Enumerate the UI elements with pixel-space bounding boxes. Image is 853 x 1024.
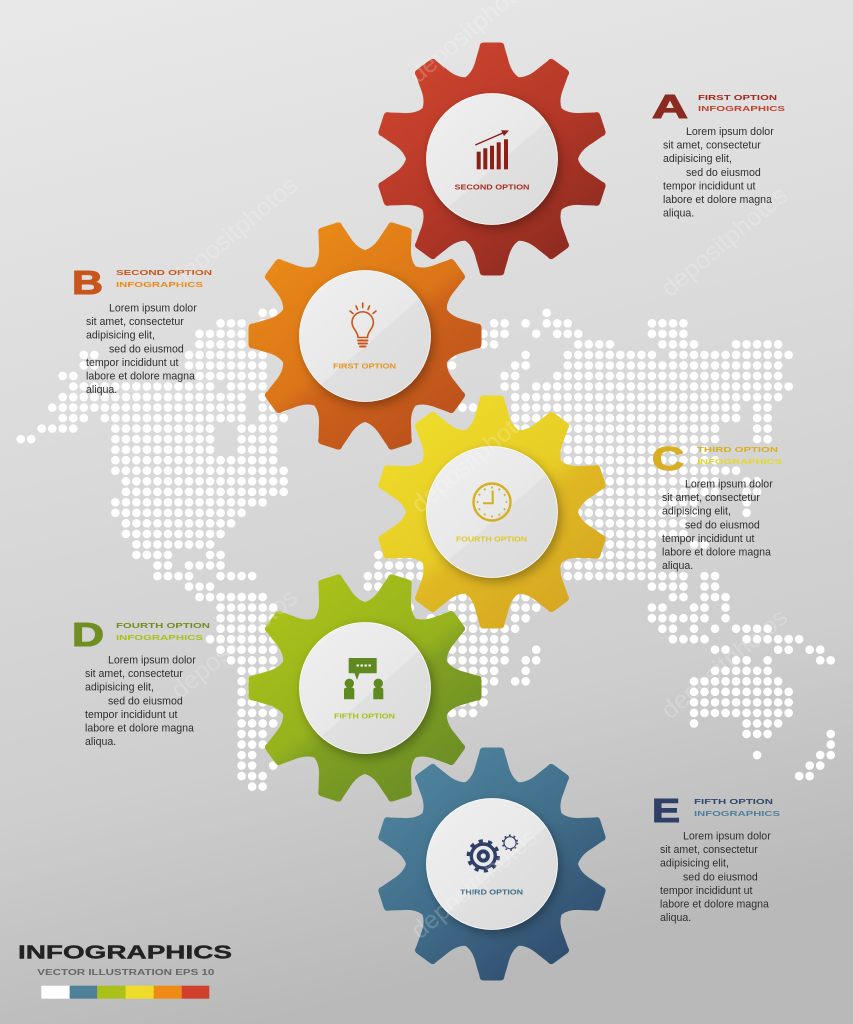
text block D	[72, 616, 210, 748]
gear: green, fifth option	[248, 574, 482, 802]
letter D: D	[72, 616, 104, 653]
body B: Lorem ipsum dolor	[109, 302, 197, 314]
heading D: INFOGRAPHICS	[116, 633, 203, 642]
body C: Lorem ipsum dolor	[685, 478, 773, 490]
body E: Lorem ipsum dolor	[683, 830, 771, 842]
text block C	[652, 440, 782, 572]
watermarks: depositphotos	[166, 171, 303, 293]
letter A: A	[652, 88, 688, 125]
gear: yellow, fourth option	[378, 396, 606, 628]
body E: tempor incididunt ut	[660, 885, 753, 897]
letter B: B	[72, 264, 103, 301]
watermarks: depositphotos	[656, 603, 793, 725]
body E: adipisicing elit,	[660, 858, 729, 870]
heading C: INFOGRAPHICS	[697, 457, 782, 466]
body D: adipisicing elit,	[85, 682, 154, 694]
colour legend bar	[41, 986, 209, 999]
gear: orange, first option	[248, 222, 482, 450]
body A: Lorem ipsum dolor	[686, 126, 774, 138]
body B: adipisicing elit,	[86, 330, 155, 342]
label: fifth option: FIFTH OPTION	[334, 714, 395, 720]
body C: tempor incididunt ut	[662, 533, 755, 545]
body E: labore et dolore magna	[660, 898, 769, 910]
label: third option: THIRD OPTION	[460, 890, 523, 896]
watermarks: depositphotos	[406, 823, 543, 945]
body D: labore et dolore magna	[85, 722, 194, 734]
body B: sit amet, consectetur	[86, 316, 184, 328]
body A: aliqua.	[663, 208, 694, 220]
text block E	[652, 792, 780, 924]
body C: labore et dolore magna	[662, 546, 771, 558]
body D: aliqua.	[85, 736, 116, 748]
body D: sit amet, consectetur	[85, 668, 183, 680]
watermarks: depositphotos	[406, 397, 543, 519]
body B: labore et dolore magna	[86, 370, 195, 382]
label: second option: SECOND OPTION	[454, 184, 530, 192]
heading E	[694, 797, 780, 818]
watermarks: depositphotos	[166, 583, 303, 705]
heading C: THIRD OPTION	[697, 445, 778, 454]
text block A	[652, 88, 785, 220]
body C: sed do eiusmod	[685, 519, 760, 531]
label: first option: FIRST OPTION	[333, 364, 396, 370]
body B: sed do eiusmod	[109, 343, 184, 355]
heading E: FIFTH OPTION	[694, 797, 773, 806]
body E: aliqua.	[660, 912, 691, 924]
text block B	[72, 264, 212, 396]
icon: bar chart with arrow	[475, 130, 509, 169]
icon: gears	[468, 835, 517, 871]
icon: light bulb	[350, 303, 376, 346]
body A: tempor incididunt ut	[663, 180, 756, 192]
icon: two people talking	[344, 658, 383, 699]
body E: sed do eiusmod	[683, 871, 758, 883]
body D: tempor incididunt ut	[85, 709, 178, 721]
body C: adipisicing elit,	[662, 506, 731, 518]
body C: sit amet, consectetur	[662, 492, 760, 504]
body D: Lorem ipsum dolor	[108, 654, 196, 666]
label: fourth option: FOURTH OPTION	[456, 536, 527, 544]
body B: aliqua.	[86, 384, 117, 396]
gear: red, second option	[378, 42, 606, 276]
heading B	[116, 268, 212, 289]
heading A: INFOGRAPHICS	[698, 104, 785, 113]
body B: tempor incididunt ut	[86, 357, 179, 369]
heading C	[697, 445, 782, 466]
dotted world map	[21, 313, 831, 787]
heading A	[698, 93, 785, 113]
icon: clock	[474, 484, 510, 520]
watermarks: depositphotos	[656, 181, 793, 303]
body E: sit amet, consectetur	[660, 844, 758, 856]
heading A: FIRST OPTION	[698, 93, 777, 102]
body A: adipisicing elit,	[663, 153, 732, 165]
letter C: C	[652, 440, 684, 477]
footer subtitle: VECTOR ILLUSTRATION EPS 10	[37, 968, 215, 977]
body A: labore et dolore magna	[663, 194, 772, 206]
gear: blue, third option	[378, 748, 606, 980]
body C: aliqua.	[662, 560, 693, 572]
body A: sit amet, consectetur	[663, 140, 761, 152]
heading B: SECOND OPTION	[116, 268, 212, 277]
letter E: E	[652, 792, 680, 829]
footer title: INFOGRAPHICS	[18, 942, 232, 962]
heading D: FOURTH OPTION	[116, 621, 210, 630]
body D: sed do eiusmod	[108, 695, 183, 707]
watermarks	[166, 0, 793, 945]
heading E: INFOGRAPHICS	[694, 809, 780, 818]
heading B: INFOGRAPHICS	[116, 280, 203, 289]
heading D	[116, 621, 210, 642]
body A: sed do eiusmod	[686, 167, 761, 179]
